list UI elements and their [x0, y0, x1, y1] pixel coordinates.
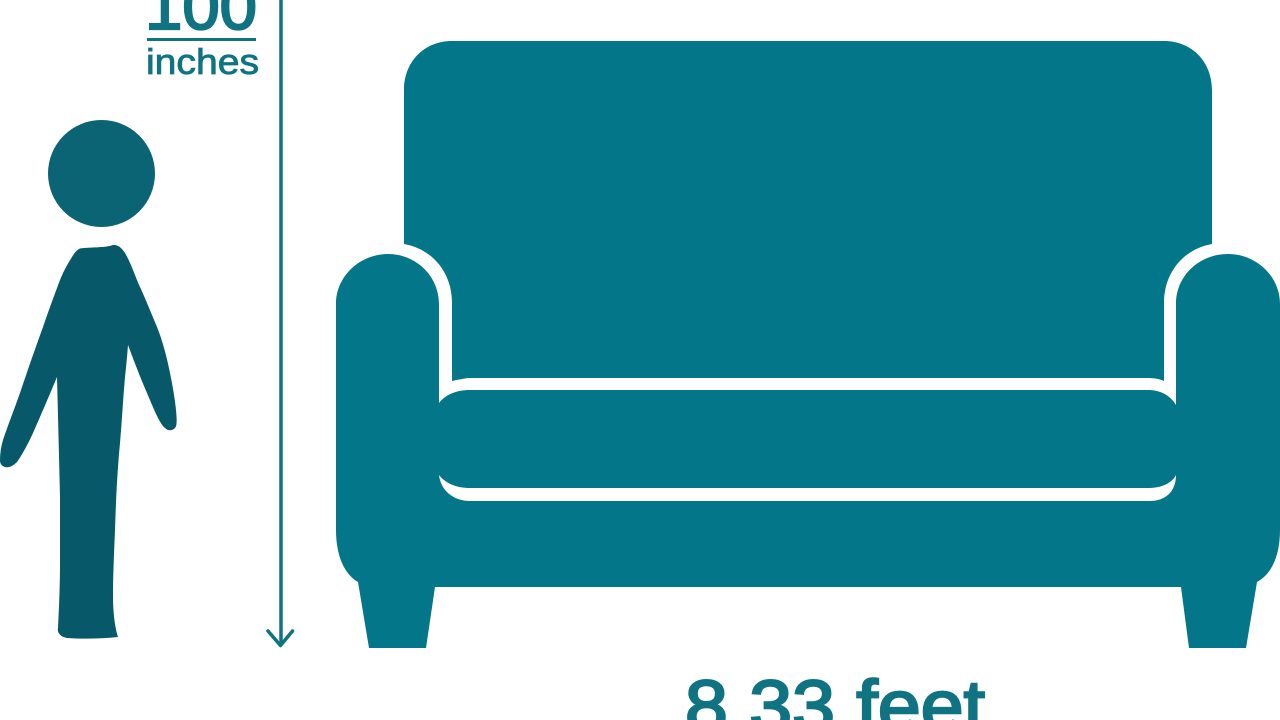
icon: sofa [336, 41, 1280, 648]
sofa arms, seat cushion and base [336, 254, 1280, 648]
sofa back [404, 41, 1212, 381]
height label: 100 inches: inches [146, 41, 259, 82]
body [0, 245, 177, 639]
head [48, 120, 155, 227]
height label: 100 inches [145, 0, 259, 82]
icon: person silhouette [0, 120, 177, 639]
cushion underside gap [439, 475, 1176, 501]
height arrow [268, 0, 292, 646]
